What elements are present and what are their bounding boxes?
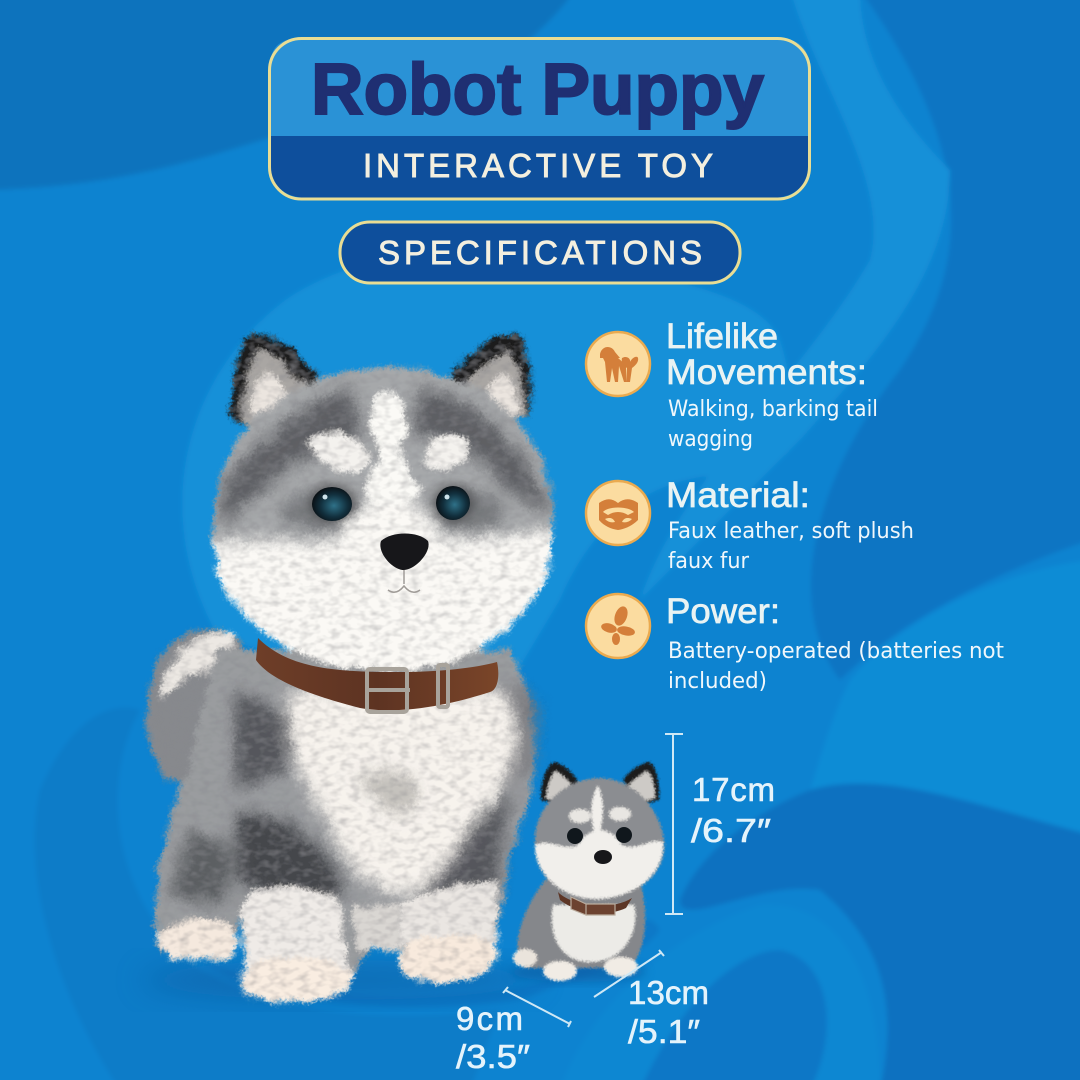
head dark streaks — [222, 385, 552, 532]
belly — [350, 905, 400, 950]
dimension: height: 17cm — [692, 771, 775, 808]
dimension: depth: /3.5″ — [456, 1038, 530, 1075]
text: power detail: Battery-operated (batteries not — [668, 639, 1004, 664]
eyes — [309, 484, 355, 522]
feature: lifelike movements: Movements: — [666, 353, 867, 392]
small body — [517, 880, 645, 968]
collar — [256, 638, 498, 710]
text: material detail: Faux leather, soft plush — [668, 519, 914, 544]
feature: lifelike movements: wagging — [668, 427, 753, 452]
shadow — [140, 960, 540, 1000]
large husky puppy — [140, 332, 575, 1002]
chest — [287, 690, 519, 895]
body — [156, 650, 534, 985]
front left leg — [242, 887, 350, 975]
back paw — [156, 919, 242, 960]
small collar — [558, 892, 632, 913]
body dark patches — [170, 680, 535, 905]
dimension: height — [665, 734, 775, 914]
dimension: height: /6.7″ — [691, 812, 771, 849]
small ears — [541, 762, 578, 805]
heading: material: Material: — [666, 476, 810, 515]
heading: Robot Puppy: Robot Puppy — [311, 50, 764, 130]
specifications pill — [340, 222, 740, 283]
brow marks — [306, 425, 374, 479]
small eyes — [567, 828, 583, 844]
buckle — [367, 665, 448, 712]
forehead blaze — [363, 388, 420, 506]
icon: fabric swatch — [586, 481, 650, 545]
dimension: depth: 9cm — [456, 1000, 523, 1037]
feature: lifelike movements — [586, 317, 878, 452]
icon: walking dogs — [586, 332, 650, 396]
head — [213, 367, 554, 670]
feature: power: included) — [668, 669, 767, 694]
feature: material: faux fur — [668, 549, 750, 574]
small head — [535, 778, 664, 900]
small nose — [594, 850, 612, 864]
small husky puppy — [510, 762, 664, 982]
badge bottom band — [270, 136, 809, 198]
heading: power: Power: — [666, 592, 780, 631]
feature: material — [586, 476, 914, 574]
ear right — [450, 332, 531, 430]
title badge — [270, 38, 810, 199]
cheeks and muzzle — [208, 492, 557, 672]
subheading: Interactive Toy: INTERACTIVE TOY — [363, 147, 713, 184]
feature: power — [586, 592, 1004, 694]
nose — [380, 534, 429, 570]
dimension: width: 13cm — [628, 974, 709, 1011]
tail — [147, 629, 250, 790]
dimension: width: /5.1″ — [628, 1013, 700, 1050]
small paws — [513, 949, 537, 967]
front right leg — [400, 880, 498, 945]
heading: lifelike movements: Lifelike — [666, 317, 778, 356]
badge top panel — [270, 39, 809, 136]
ear left — [231, 332, 322, 440]
text: walking: Walking, barking tail — [668, 397, 878, 422]
dimension: width — [594, 950, 709, 1050]
badge border — [270, 38, 810, 199]
specifications pill: SPECIFICATIONS — [378, 234, 702, 271]
icon: clover — [586, 594, 650, 658]
dimension: depth — [456, 987, 571, 1075]
